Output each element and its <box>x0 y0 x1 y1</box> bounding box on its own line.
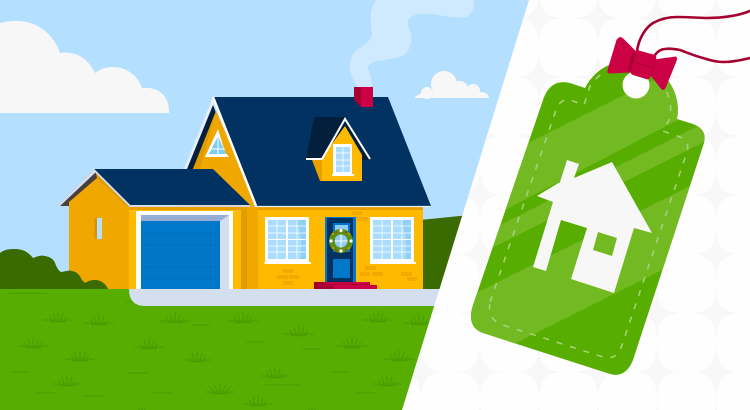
garage side wall <box>69 178 130 289</box>
garage front wall <box>129 206 258 289</box>
dormer <box>306 117 370 181</box>
front steps <box>314 282 377 289</box>
tag body <box>471 61 705 375</box>
garage roof <box>93 169 250 206</box>
house icon on tag <box>533 160 652 293</box>
bushes <box>0 249 108 289</box>
lawn <box>0 289 470 410</box>
small cloud <box>414 71 489 99</box>
right window <box>370 217 416 264</box>
gable window <box>205 129 229 157</box>
grass tufts <box>9 293 434 410</box>
price tag <box>470 65 705 375</box>
side window <box>94 218 102 239</box>
large cloud <box>0 21 169 113</box>
right wing <box>650 57 676 90</box>
main wall <box>258 206 423 289</box>
driveway path <box>129 289 460 306</box>
background hill <box>420 215 470 295</box>
left wing <box>608 38 636 73</box>
upper gable <box>180 97 258 206</box>
chimney smoke <box>350 0 474 88</box>
bricks <box>277 211 417 285</box>
star pattern <box>412 17 524 376</box>
main roof <box>213 97 431 206</box>
dormer window <box>332 144 354 176</box>
tag light stripes <box>470 80 705 344</box>
tag hole <box>622 72 650 98</box>
front door <box>325 217 356 283</box>
tag strings <box>637 11 750 62</box>
white diagonal panel <box>402 0 750 410</box>
chimney <box>354 87 373 107</box>
house <box>57 87 431 289</box>
left window <box>264 217 311 264</box>
garage door <box>136 211 233 289</box>
wreath <box>329 229 353 253</box>
knot <box>631 50 656 79</box>
garage eave <box>57 169 130 206</box>
stitching <box>490 66 688 358</box>
red bow <box>608 38 676 90</box>
